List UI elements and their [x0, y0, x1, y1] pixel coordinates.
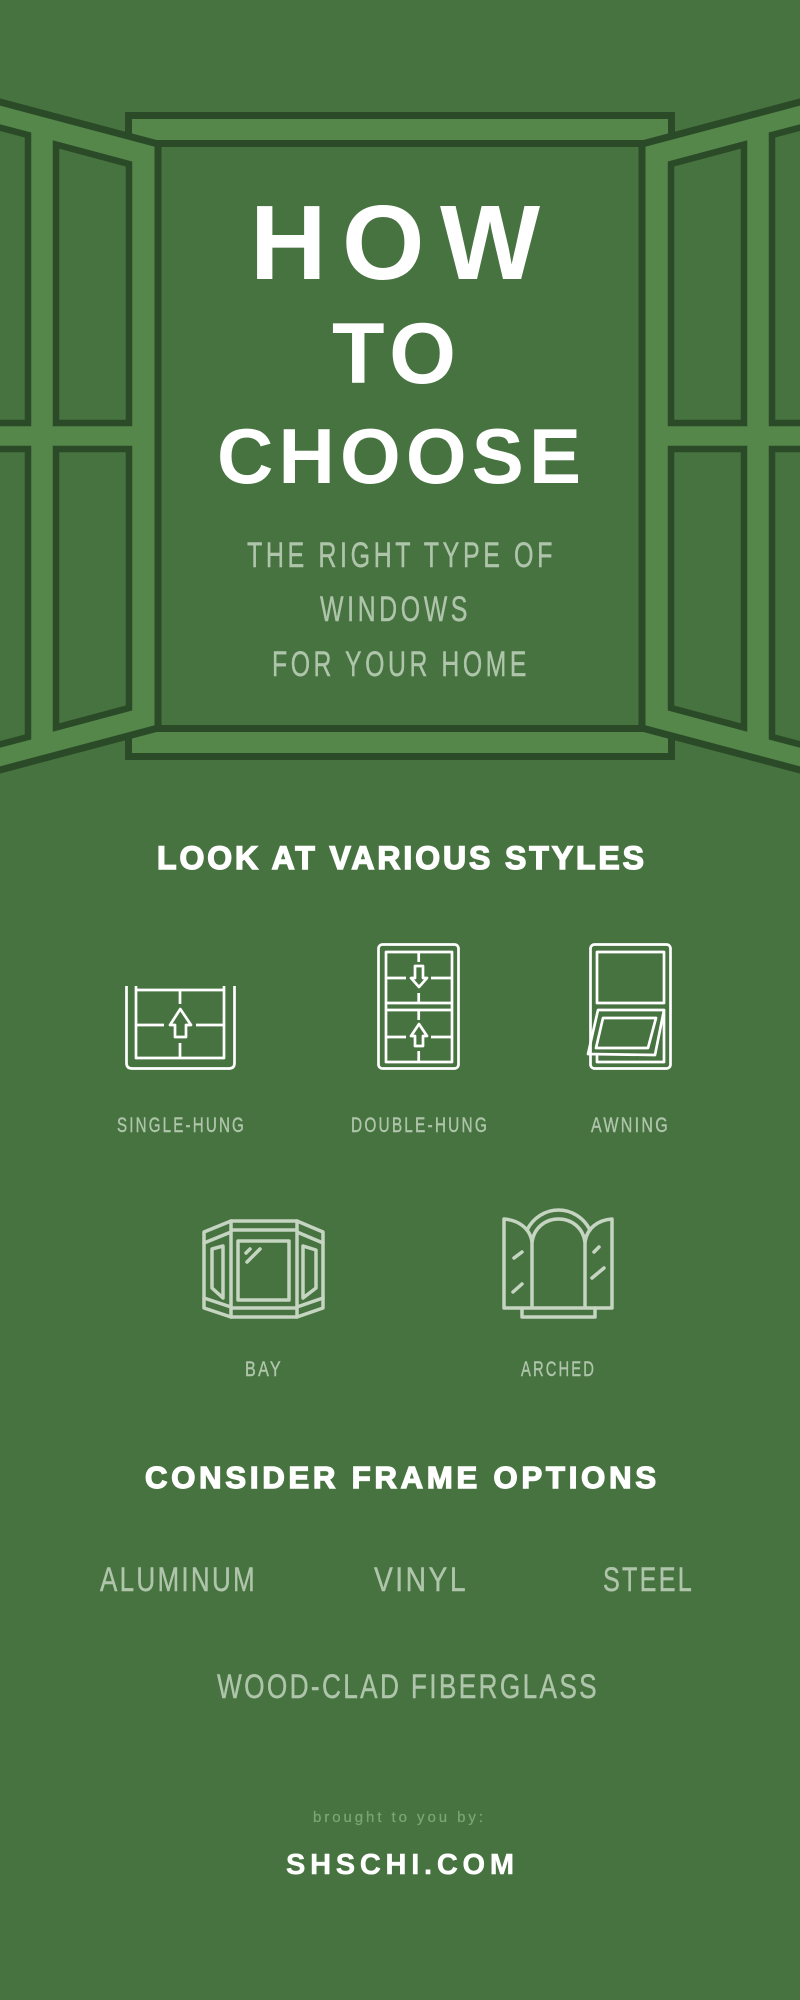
frame option: aluminum: ALUMINUM: [100, 1561, 257, 1599]
title line: how: HOW: [250, 184, 540, 302]
icon: awning window: [588, 944, 670, 1068]
label: double-hung: DOUBLE-HUNG: [351, 1114, 489, 1137]
title line: to: TO: [332, 306, 456, 402]
icon: bay window: [204, 1221, 323, 1317]
frame option: steel: STEEL: [603, 1561, 694, 1599]
label: single-hung: SINGLE-HUNG: [117, 1114, 246, 1137]
icon: single-hung window: [126, 986, 234, 1068]
window opening: [158, 144, 642, 728]
open window illustration: [0, 99, 800, 773]
subtitle: [247, 536, 556, 684]
icon: double-hung window: [378, 944, 458, 1068]
icon: arched window: [504, 1210, 612, 1317]
subtitle line 3: FOR YOUR HOME: [272, 645, 530, 684]
left shutter: [0, 99, 158, 773]
label: arched: ARCHED: [521, 1358, 596, 1381]
heading: consider frame options: CONSIDER FRAME OPTIONS: [145, 1460, 656, 1495]
window outer sill frame: [128, 116, 672, 756]
title: [217, 184, 581, 500]
title line: choose: CHOOSE: [217, 412, 581, 500]
right shutter: [642, 99, 800, 773]
website: SHSCHI.COM: [286, 1849, 514, 1881]
label: bay: BAY: [245, 1358, 283, 1381]
credit line: brought to you by:: [313, 1809, 483, 1826]
label: awning: AWNING: [591, 1114, 670, 1137]
frame option: vinyl: VINYL: [374, 1561, 468, 1599]
frame option: wood-clad fiberglass: WOOD-CLAD FIBERGLASS: [217, 1668, 599, 1706]
subtitle line 1: THE RIGHT TYPE OF: [247, 536, 556, 575]
heading: look at various styles: LOOK AT VARIOUS STYLES: [157, 840, 644, 876]
subtitle line 2: WINDOWS: [320, 590, 471, 629]
